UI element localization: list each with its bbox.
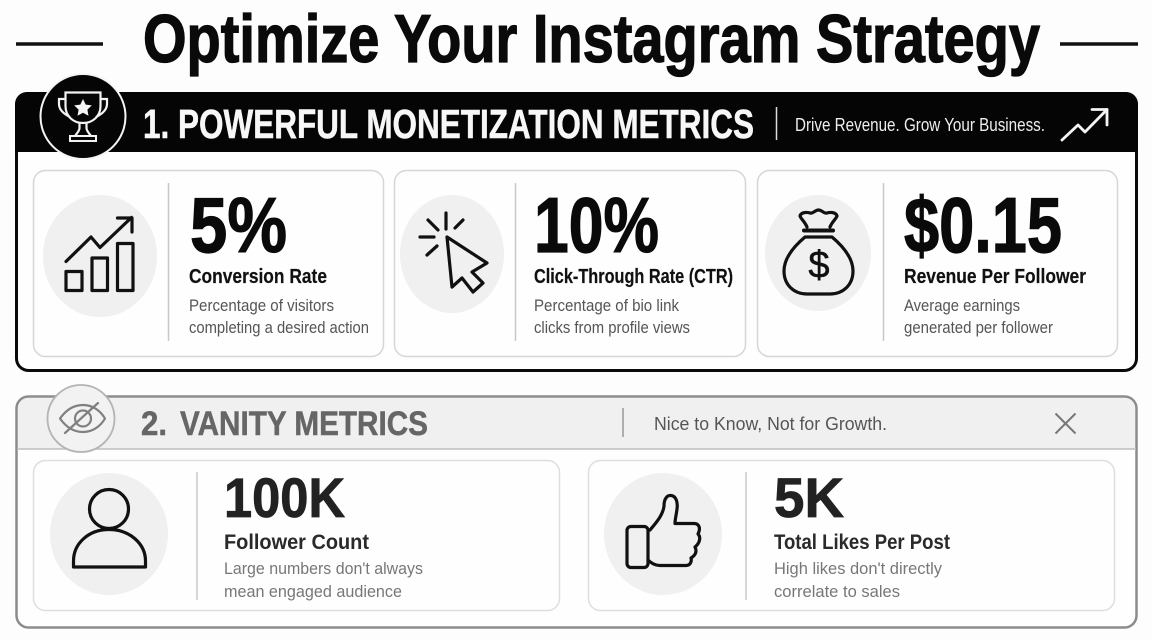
card: click-through rate	[394, 170, 746, 356]
panel header bar	[18, 398, 1135, 449]
description: click-through rate: Percentage of bio link	[534, 297, 680, 315]
description: revenue per follower	[904, 297, 1053, 337]
description: conversion rate: completing a desired action	[189, 319, 369, 337]
label: revenue per follower: Revenue Per Follower	[904, 266, 1086, 288]
description: click-through rate: clicks from profile views	[534, 319, 690, 337]
panel: vanity metrics	[16, 385, 1136, 628]
section tagline 1: Drive Revenue. Grow Your Business.	[795, 115, 1045, 135]
section heading 2: VANITY METRICS	[180, 405, 428, 443]
icon: close x	[1056, 414, 1076, 434]
icon: thumbs up	[627, 495, 700, 568]
metric: 100K: 100K	[224, 466, 345, 529]
section heading 2: 2.	[141, 405, 167, 443]
description: click-through rate	[534, 297, 690, 337]
icon: money bag: $	[808, 244, 830, 286]
icon: cursor click	[420, 213, 487, 292]
description: follower count: Large numbers don't always	[224, 560, 423, 578]
section heading 1: 1. POWERFUL MONETIZATION METRICS	[143, 101, 754, 147]
description: revenue per follower: Average earnings	[904, 297, 1020, 315]
label: conversion rate: Conversion Rate	[189, 266, 327, 288]
description: revenue per follower: generated per follower	[904, 319, 1053, 337]
icon: person	[74, 490, 146, 567]
label: follower count: Follower Count	[224, 531, 369, 554]
card: revenue per follower	[758, 170, 1118, 356]
icon: money bag	[784, 210, 853, 294]
metric: 5%: 5%	[190, 181, 287, 269]
card: total likes per post	[588, 460, 1114, 610]
description: conversion rate	[189, 297, 369, 337]
card: conversion rate	[34, 170, 384, 356]
metric: 10%: 10%	[534, 181, 659, 269]
description: total likes per post	[774, 560, 943, 601]
panel: powerful monetization metrics	[15, 74, 1138, 370]
label: total likes per post: Total Likes Per Post	[774, 531, 950, 554]
description: conversion rate: Percentage of visitors	[189, 297, 334, 315]
icon: trending arrow	[1062, 110, 1107, 140]
icon: trophy badge	[40, 74, 126, 159]
icon: bar chart growth	[66, 218, 133, 290]
label: click-through rate: Click-Through Rate (CTR)	[534, 266, 733, 288]
description: total likes per post: correlate to sales	[774, 583, 900, 601]
metric: $0.15: $0.15	[904, 181, 1062, 269]
description: follower count	[224, 560, 423, 601]
icon: crossed eye badge	[48, 385, 114, 452]
description: follower count: mean engaged audience	[224, 583, 402, 601]
description: total likes per post: High likes don't directly	[774, 560, 943, 578]
panel header bar	[15, 92, 1138, 152]
metric: 5K: 5K	[774, 466, 844, 529]
section tagline 2: Nice to Know, Not for Growth.	[654, 414, 887, 434]
card: follower count	[34, 460, 560, 610]
